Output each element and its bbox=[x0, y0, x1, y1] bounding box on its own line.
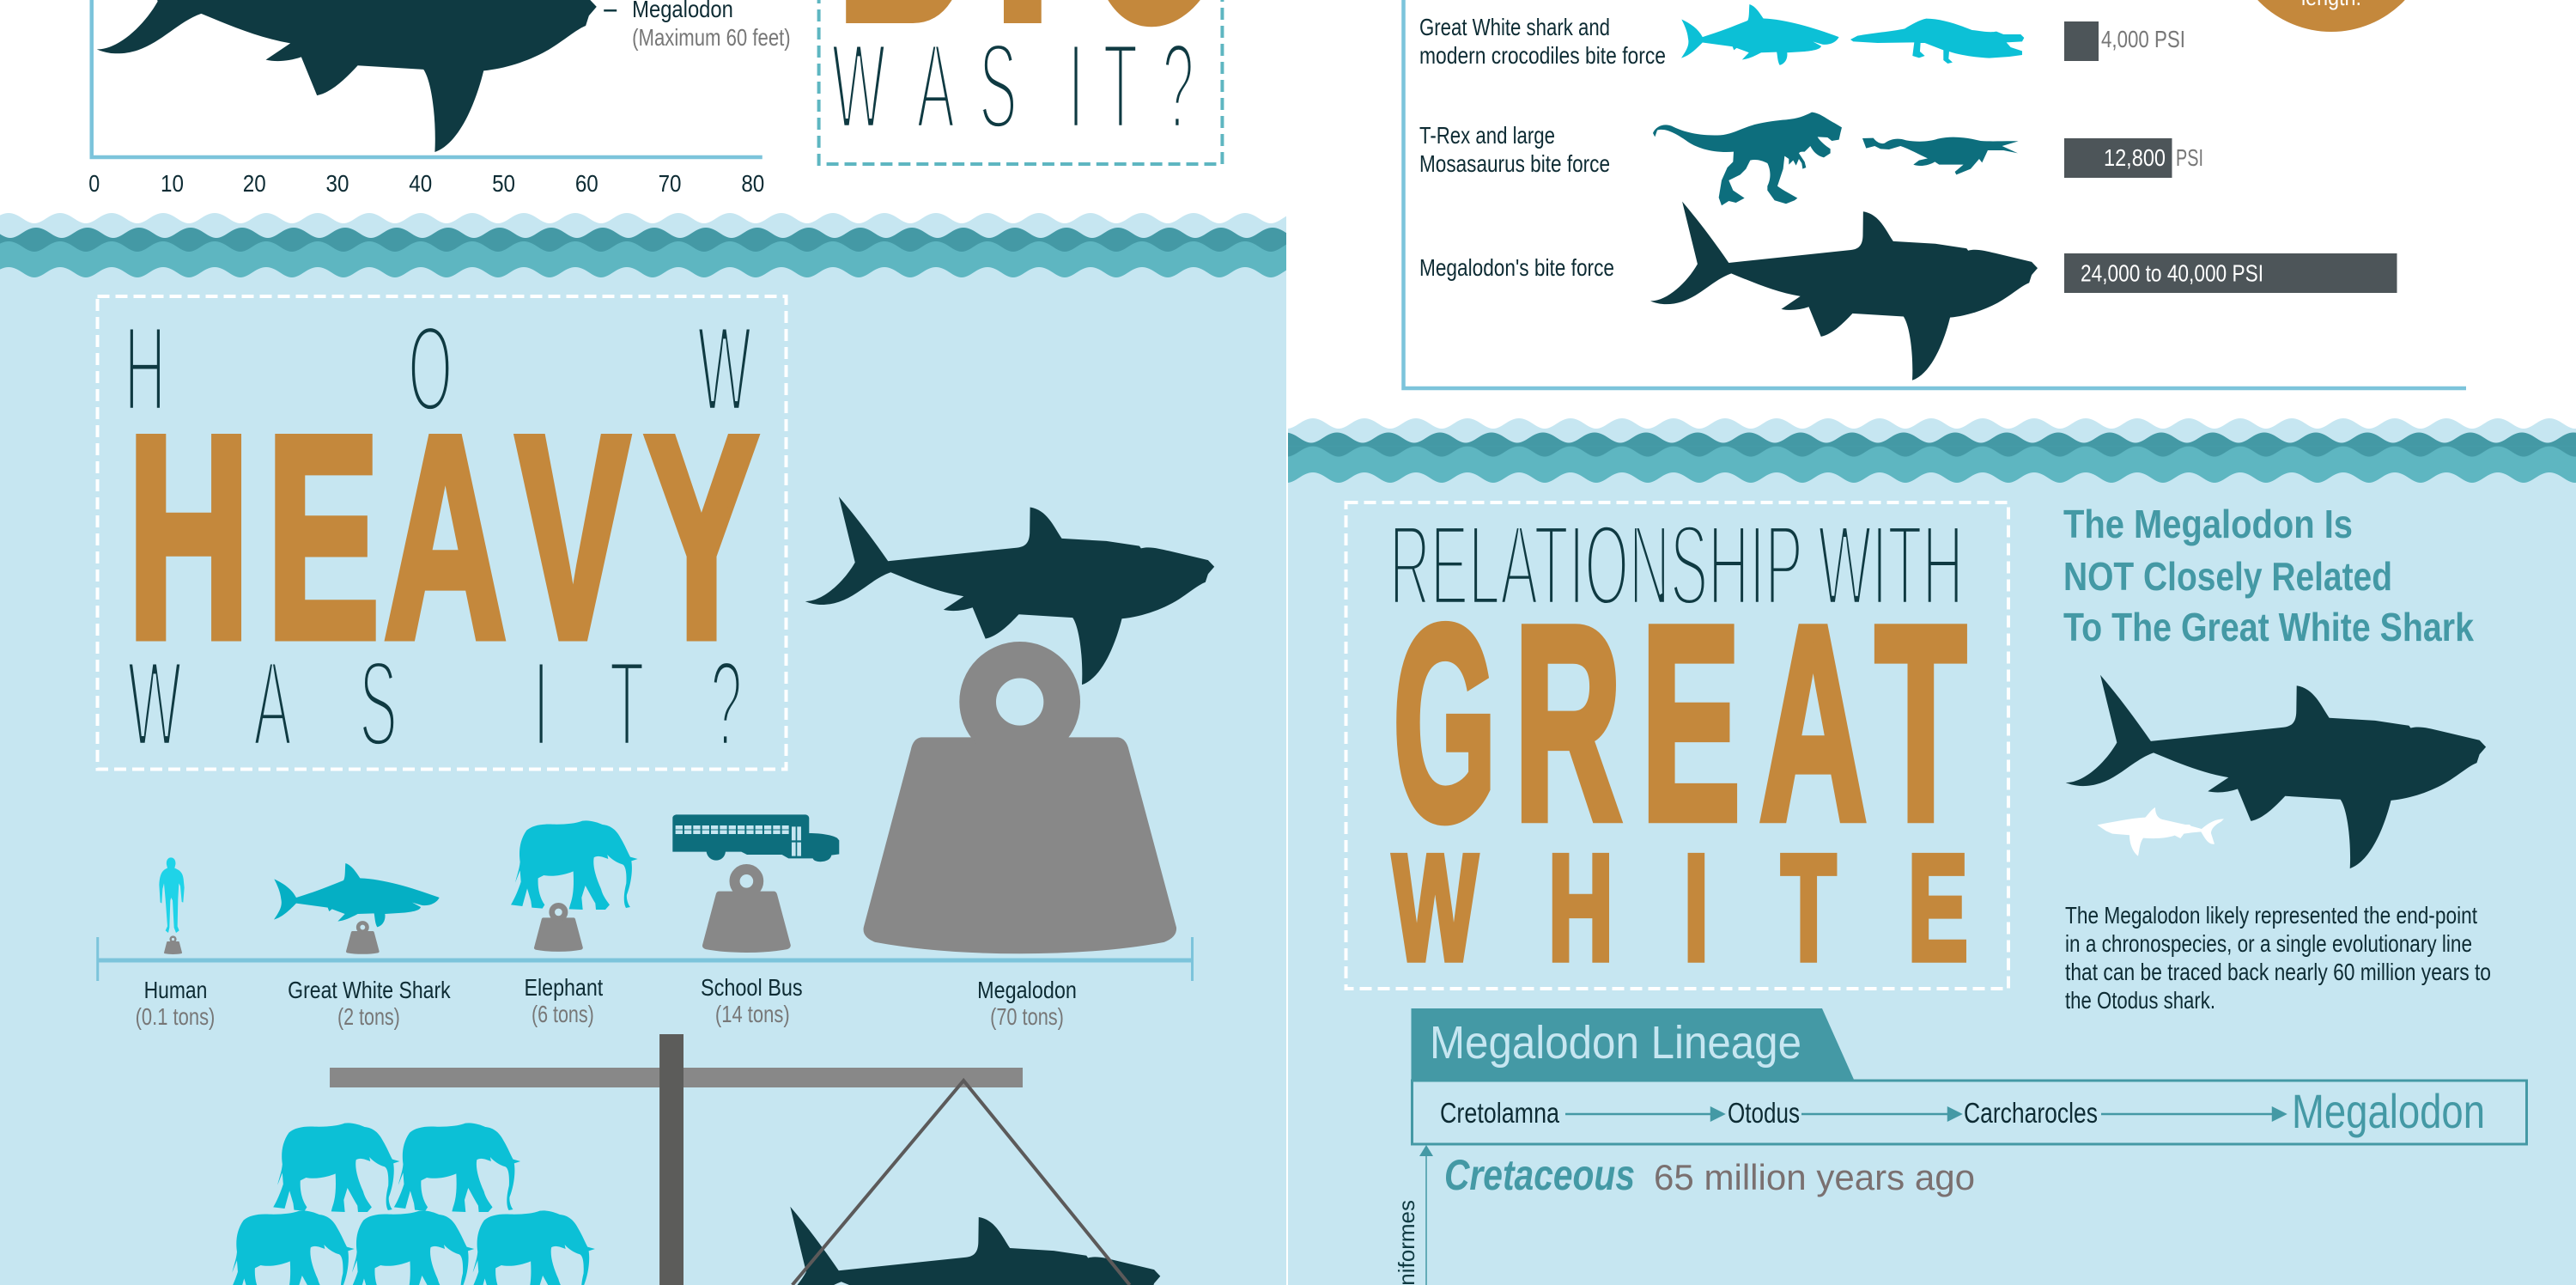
label: Megalodon's bite force bbox=[1419, 254, 1614, 281]
label: megalodon weight bbox=[977, 977, 1077, 1030]
timeline: cretaceous label: Cretaceous bbox=[1444, 1151, 1635, 1199]
icon: weight bbox=[534, 905, 583, 952]
heading: how heavy was it bbox=[98, 296, 787, 772]
icon: weight bbox=[702, 869, 791, 953]
bar bbox=[2064, 253, 2397, 293]
tab bbox=[1412, 1008, 1855, 1081]
icon: human bbox=[159, 857, 185, 933]
label: School Bus bbox=[701, 974, 803, 1001]
bar bbox=[2064, 21, 2099, 61]
icon: weight bbox=[346, 923, 380, 954]
heading: relationship with great white bbox=[1346, 502, 2008, 992]
weight comparison line bbox=[97, 937, 1193, 981]
timeline: cretaceous label bbox=[1444, 1151, 1975, 1199]
icon: elephant bbox=[511, 820, 638, 910]
shark in sling bbox=[757, 1207, 1160, 1285]
sling bbox=[793, 1081, 1130, 1285]
label: Great White Shark bbox=[288, 977, 452, 1003]
subheading: not closely related bbox=[2063, 502, 2474, 649]
panel: how heavy bbox=[0, 292, 1286, 1285]
timeline: cretaceous label: 65 million years ago bbox=[1654, 1157, 1975, 1197]
label bbox=[524, 974, 603, 1027]
x axis numbers: 0 bbox=[88, 170, 100, 197]
row: megalodon bbox=[1419, 202, 2397, 381]
arrow bbox=[2101, 1108, 2285, 1120]
megalodon label: (Maximum 60 feet) bbox=[632, 24, 791, 51]
word WHITE: WHITE bbox=[1393, 823, 1968, 992]
subheading: not closely related: NOT Closely Related bbox=[2063, 554, 2392, 599]
words WAS IT?: WASIT? bbox=[832, 19, 1194, 155]
label: (2 tons) bbox=[337, 1003, 400, 1030]
label: T-Rex and large bbox=[1419, 122, 1555, 149]
axes bbox=[1403, 0, 2466, 388]
panel: megalodon lineage bbox=[1412, 1008, 2526, 1144]
arrow bbox=[1565, 1108, 1723, 1120]
label: Great White shark and bbox=[1419, 14, 1610, 40]
label: (0.1 tons) bbox=[136, 1003, 215, 1030]
x axis numbers: 40 bbox=[409, 170, 432, 197]
step: Otodus: Otodus bbox=[1728, 1097, 1800, 1129]
item: great white shark bbox=[274, 863, 452, 1030]
row: t-rex and mosasaurus bbox=[1419, 113, 2203, 205]
label bbox=[1419, 122, 1610, 177]
words HOW: HOW bbox=[125, 301, 751, 437]
subheading: not closely related: To The Great White Shark bbox=[2063, 605, 2474, 649]
x axis numbers: 50 bbox=[492, 170, 515, 197]
icon: megalodon vs great white bbox=[2066, 675, 2486, 868]
label bbox=[288, 977, 452, 1030]
megalodon silhouette bbox=[97, 0, 597, 152]
value: 12,800 bbox=[2104, 144, 2166, 171]
label: (14 tons) bbox=[715, 1001, 790, 1027]
label: Elephant bbox=[524, 974, 603, 1001]
balance scale bbox=[228, 1034, 1160, 1285]
elephants stack bbox=[228, 1123, 595, 1285]
x axis numbers: 60 bbox=[575, 170, 598, 197]
value: 24,000 to 40,000 PSI bbox=[2081, 259, 2263, 287]
icon: shark bbox=[274, 863, 440, 927]
word GREAT: REAT bbox=[1514, 569, 1966, 877]
value: PSI bbox=[2176, 144, 2203, 171]
word GREAT: G bbox=[1393, 568, 1497, 878]
panel: bite force chart bbox=[1403, 0, 2466, 388]
heading: how big was it (cropped) bbox=[819, 0, 1222, 164]
icon: bus bbox=[672, 814, 839, 862]
text block: chronospecies: the Otodus shark. bbox=[2065, 987, 2215, 1014]
panel: how big chart (cropped top section, left) bbox=[88, 0, 791, 197]
label: modern crocodiles bite force bbox=[1419, 42, 1666, 69]
pole bbox=[659, 1034, 683, 1285]
icon: great white bbox=[1681, 4, 1839, 65]
label bbox=[1419, 14, 1666, 69]
label: Human bbox=[144, 977, 207, 1003]
label bbox=[701, 974, 803, 1027]
step: Cretolamna: Cretolamna bbox=[1440, 1097, 1560, 1129]
x axis numbers bbox=[88, 170, 764, 197]
icon: megalodon bbox=[1650, 202, 2038, 381]
icon: weight bbox=[164, 937, 182, 954]
word HEAVY: HEAVY bbox=[127, 377, 758, 698]
words WAS IT?: WASIT? bbox=[128, 636, 742, 772]
megalodon label bbox=[604, 0, 791, 51]
step: Carcharocles: Carcharocles bbox=[1964, 1097, 2098, 1129]
label: (6 tons) bbox=[532, 1001, 594, 1027]
callout: orange circle (cropped) bbox=[2230, 0, 2433, 32]
x axis numbers: 20 bbox=[243, 170, 266, 197]
text block: chronospecies bbox=[2065, 902, 2491, 1014]
x axis numbers: 70 bbox=[659, 170, 682, 197]
text block: chronospecies: that can be traced back nearly 60 million years to bbox=[2065, 959, 2491, 985]
waves: right panel bbox=[1288, 418, 2576, 498]
label bbox=[136, 977, 215, 1030]
label: megalodon weight: Megalodon bbox=[977, 977, 1077, 1003]
icon: t-rex bbox=[1653, 113, 1842, 205]
item: human bbox=[136, 857, 215, 1030]
icon: mosasaurus bbox=[1862, 137, 2019, 174]
item: school bus bbox=[672, 814, 839, 1027]
waves: left panel bbox=[0, 213, 1286, 293]
label: Mosasaurus bite force bbox=[1419, 150, 1610, 177]
tab title: Megalodon Lineage bbox=[1430, 1017, 1801, 1069]
x axis numbers: 30 bbox=[326, 170, 349, 197]
subheading: not closely related: The Megalodon Is bbox=[2063, 502, 2353, 546]
label: megalodon weight: (70 tons) bbox=[990, 1003, 1064, 1030]
beam bbox=[330, 1068, 1023, 1087]
x axis numbers: 80 bbox=[741, 170, 764, 197]
box bbox=[1412, 1081, 2526, 1144]
panel: relationship with great white bbox=[1288, 497, 2576, 1285]
timeline: vertical arrow bbox=[1419, 1145, 1433, 1285]
words RELATIONSHIP WITH: RELATIONSHIP WITH bbox=[1389, 502, 1964, 630]
row: great white and crocodile bbox=[1419, 4, 2185, 69]
axis lines bbox=[92, 0, 762, 157]
icon: megalodon on big weight bbox=[805, 496, 1214, 953]
text block: chronospecies: The Megalodon likely represented the end-point bbox=[2065, 902, 2477, 929]
step: Megalodon: Megalodon bbox=[2292, 1084, 2485, 1138]
arrow bbox=[1801, 1108, 1960, 1120]
text block: chronospecies: in a chronospecies, or a single evolutionary line bbox=[2065, 930, 2472, 957]
item: elephant bbox=[511, 820, 638, 1027]
bar bbox=[2064, 138, 2172, 178]
icon: crocodile bbox=[1850, 19, 2024, 64]
x axis numbers: 10 bbox=[161, 170, 184, 197]
value: 4,000 PSI bbox=[2101, 26, 2185, 52]
